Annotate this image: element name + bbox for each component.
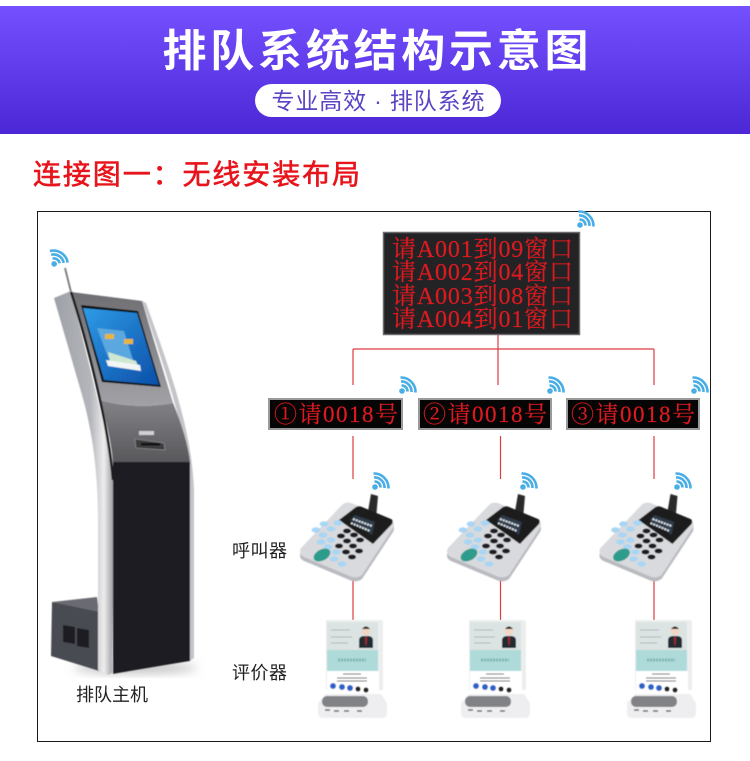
icon: wifi display 1 [399,377,416,394]
upper bezel [71,292,173,406]
label: queue host: 排队主机 [76,685,148,705]
screen [81,305,161,387]
label: caller: 呼叫器 [232,541,287,561]
antenna [65,268,71,292]
card slot [135,431,165,450]
diagram frame [38,212,710,742]
base box [51,597,99,671]
icon: wifi kiosk [49,248,68,267]
black lower body [113,462,190,674]
LED text lines: 请A004到01窗口 [392,306,573,333]
LED text lines: 请A003到08窗口 [392,283,573,310]
icon: wifi caller 1 [372,473,389,490]
connection lines [353,334,654,620]
silver edge [54,291,115,675]
title: 排队系统结构示意图 [162,27,588,76]
header banner [0,6,750,134]
LED text lines: 请A002到04窗口 [392,259,573,286]
subtitle pill: 专业高效 · 排队系统 [272,88,484,114]
caller keypad 3 [600,494,694,581]
icon: wifi caller 2 [520,473,537,490]
small LED display 2: ②请0018号 [423,402,547,427]
caller keypad 2 [447,494,541,581]
mid body [100,400,190,462]
subtitle pill [255,84,501,117]
kiosk shadow [73,663,197,673]
section heading: 连接图一：无线安装布局 [33,159,360,190]
evaluator 3 [627,620,696,718]
icon: wifi display 2 [547,377,564,394]
evaluator 1 [318,620,387,718]
kiosk: queue host [51,268,197,675]
LED text lines: 请A001到09窗口 [392,236,573,263]
small LED display 3: ③请0018号 [571,402,695,427]
icon: wifi main display [577,211,594,228]
right edge [142,301,194,661]
evaluator 2 [461,620,530,718]
icon: wifi caller 3 [674,473,691,490]
main LED display [384,232,580,334]
small LED display 1: ①请0018号 [274,402,398,427]
dark seam [71,292,113,480]
LED text lines [392,236,573,333]
icon: wifi display 3 [691,377,708,394]
label: evaluator: 评价器 [232,663,287,683]
caller keypad 1 [300,494,394,581]
